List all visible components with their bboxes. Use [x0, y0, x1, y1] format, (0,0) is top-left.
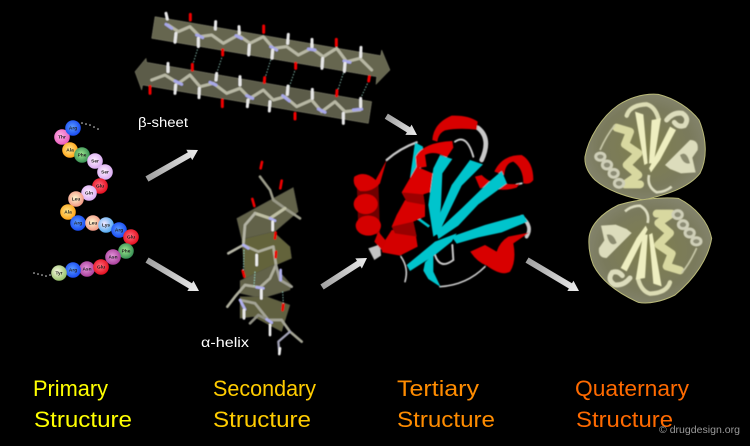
- label: primary structure: [33, 376, 132, 432]
- beads: Gln: [85, 191, 93, 197]
- beads: Thr: [58, 135, 66, 141]
- top ribbon arrow: [152, 17, 390, 84]
- back strands: [410, 142, 430, 228]
- bottom ribbon arrow: [135, 58, 372, 123]
- beads: Glu: [97, 265, 105, 271]
- label: quaternary structure: [575, 376, 689, 432]
- beads: Leu: [72, 197, 80, 203]
- label: secondary structure: [213, 376, 316, 432]
- label: secondary structure: Secondary: [213, 376, 316, 401]
- loops: [387, 128, 529, 287]
- label: primary structure: Structure: [34, 407, 132, 432]
- beta-sheet label: β-sheet: [138, 115, 188, 130]
- helix: central long: [381, 141, 453, 256]
- helix: right coil: [475, 155, 533, 190]
- beads: Arg: [74, 221, 82, 227]
- beta strands: [407, 155, 528, 287]
- beads: Arg: [69, 268, 77, 274]
- beads: Ala: [66, 148, 74, 154]
- label: primary structure: Primary: [33, 376, 108, 401]
- bottom strand: [150, 63, 362, 123]
- helix ribbon: [237, 187, 298, 332]
- beads: Asn: [82, 267, 92, 273]
- primary structure: amino acid bead chain: [33, 120, 139, 281]
- helix hydrogen bonds: [243, 250, 283, 304]
- alpha-helix label: α-helix: [201, 335, 249, 350]
- beads: Glu: [96, 184, 104, 190]
- tertiary structure: ribbon model: [354, 116, 533, 287]
- arrow: primary to alpha helix: [144, 255, 202, 296]
- beads: [51, 120, 139, 281]
- beads: Phe: [122, 249, 131, 255]
- watermark: © drugdesign.org: [659, 424, 740, 436]
- beads: Asn: [108, 255, 118, 261]
- N-terminal stub: [368, 244, 381, 260]
- beads: Phe: [78, 153, 87, 159]
- beads: Arg: [69, 126, 77, 132]
- helix backbone sticks: [227, 162, 302, 354]
- label: quaternary structure: Structure: [576, 407, 673, 432]
- label: tertiary structure: Tertiary: [397, 376, 479, 401]
- secondary structure: alpha helix: [227, 162, 302, 354]
- arrow: primary to beta sheet: [144, 145, 201, 184]
- arrow: tertiary to quaternary: [524, 255, 582, 296]
- chain end dots: [33, 122, 99, 277]
- arrow: helix to tertiary: [319, 253, 370, 292]
- helix: top: [432, 116, 478, 142]
- label: quaternary structure: Quaternary: [575, 376, 689, 401]
- beads: Leu: [89, 221, 97, 227]
- secondary structure: beta sheet: [135, 13, 390, 123]
- top strand: [166, 13, 372, 81]
- bottom subunit surface: [589, 198, 712, 303]
- quaternary structure: dimer: [585, 94, 712, 303]
- hydrogen bonds: [193, 47, 369, 98]
- beads: Lys: [102, 223, 110, 229]
- beads: Glu: [127, 235, 135, 241]
- beads: Ser: [101, 170, 109, 176]
- label: tertiary structure: Structure: [397, 407, 495, 432]
- top subunit ribbons: [596, 104, 698, 192]
- beads: Ser: [91, 159, 99, 165]
- label: tertiary structure: [397, 376, 495, 432]
- label: secondary structure: Structure: [213, 407, 311, 432]
- helix: lower right: [470, 233, 529, 273]
- helix: left coil: [354, 160, 387, 250]
- beads: Ala: [64, 210, 72, 216]
- beads: Tyr: [55, 271, 63, 277]
- beads: Arg: [115, 228, 123, 234]
- bottom subunit ribbons: [599, 206, 701, 294]
- arrow: sheet to tertiary: [383, 111, 420, 140]
- top subunit surface: [585, 94, 705, 200]
